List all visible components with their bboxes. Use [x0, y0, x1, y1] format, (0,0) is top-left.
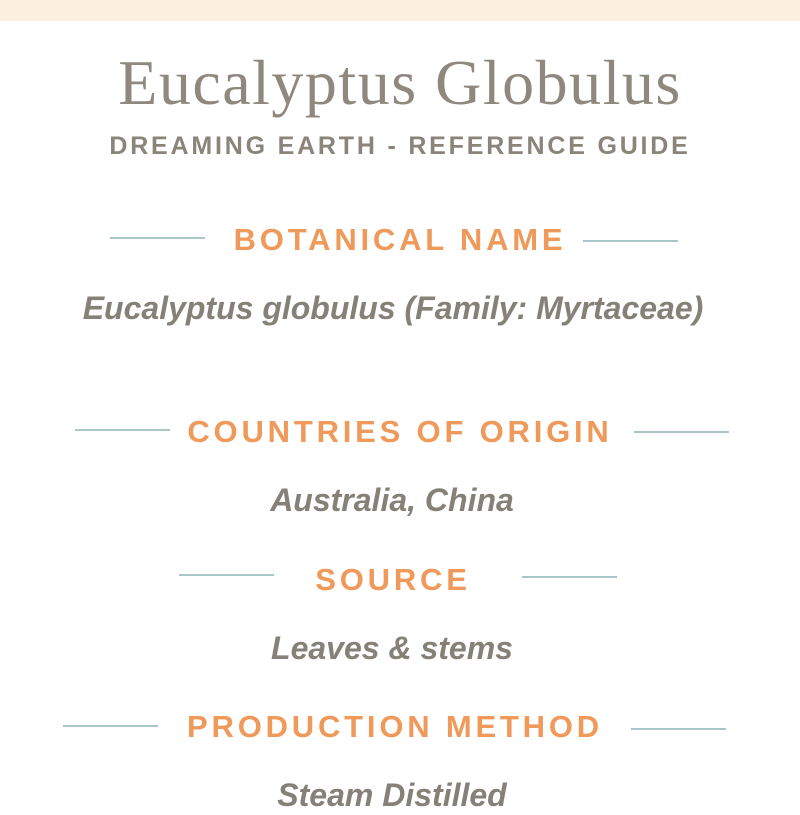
heading: source: SOURCE — [315, 562, 471, 597]
heading: production: PRODUCTION METHOD — [187, 709, 603, 744]
section: countries of origin — [75, 414, 729, 518]
section: botanical name — [83, 222, 703, 326]
text: botanical name: Eucalyptus globulus (Family: Myrtaceae) — [83, 290, 703, 326]
subtitle: DREAMING EARTH - REFERENCE GUIDE — [109, 132, 691, 160]
section: production method — [63, 709, 726, 813]
text: production: Steam Distilled — [277, 777, 507, 813]
section: source — [179, 562, 617, 666]
title: Eucalyptus Globulus — [118, 47, 682, 118]
text: countries: Australia, China — [270, 482, 514, 518]
heading: countries: COUNTRIES OF ORIGIN — [187, 414, 613, 449]
heading: botanical name: BOTANICAL NAME — [234, 222, 566, 257]
text: source: Leaves & stems — [271, 630, 513, 666]
top band — [0, 0, 800, 21]
